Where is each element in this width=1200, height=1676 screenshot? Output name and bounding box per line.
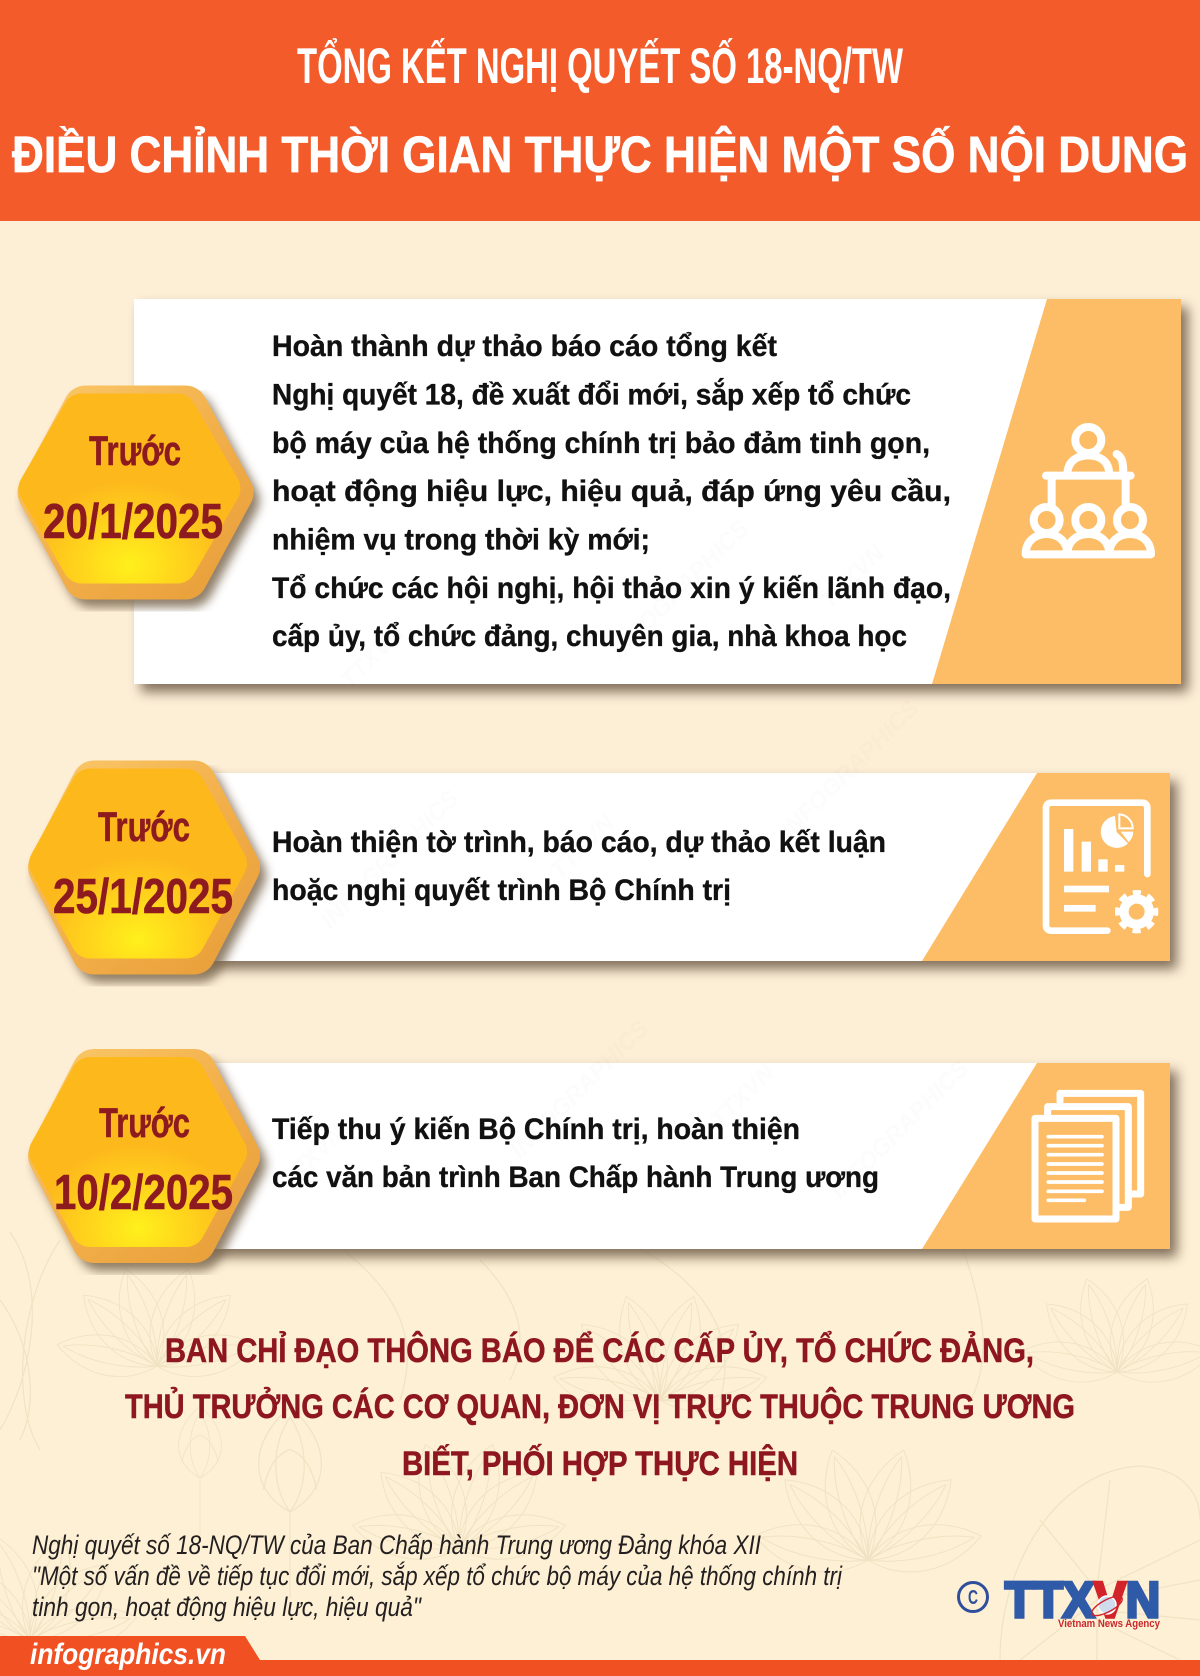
hexagon: date 20/1/2025: Trước (89, 427, 181, 474)
text: step 3 description: Tiếp thu ý kiến Bộ Chính trị, hoàn thiện (272, 1113, 800, 1146)
panel: step 3 (200, 1015, 1170, 1249)
text: step 2 description: Hoàn thiện tờ trình, báo cáo, dự thảo kết luận (272, 826, 886, 859)
text: step 1 description: bộ máy của hệ thống chính trị bảo đảm tinh gọn, (272, 427, 930, 460)
source note: Nghị quyết số 18-NQ/TW của Ban Chấp hành Trung ương Đảng khóa XII (32, 1530, 761, 1560)
hexagon: date 20/1/2025 (38, 408, 232, 578)
source note: tinh gọn, hoạt động hiệu lực, hiệu quả" (32, 1592, 422, 1622)
text: step 2 description: hoặc nghị quyết trình Bộ Chính trị (272, 874, 731, 907)
text: step 1 description: nhiệm vụ trong thời kỳ mới; (272, 524, 650, 556)
text: step 1 description: cấp ủy, tổ chức đảng, chuyên gia, nhà khoa học (272, 620, 907, 653)
text: step 3 description (272, 1113, 879, 1194)
text: step 1 description: Hoàn thành dự thảo báo cáo tổng kết (272, 330, 777, 363)
text: step 1 description: Nghị quyết 18, đề xuất đổi mới, sắp xếp tổ chức (272, 378, 911, 412)
hexagon: date 25/1/2025 (48, 782, 238, 952)
closing statement (125, 1331, 1075, 1483)
logo: TTXVN Vietnam News Agency: TTXVN (1005, 1572, 1160, 1628)
title line 1: TỔNG KẾT NGHỊ QUYẾT SỐ 18-NQ/TW (297, 37, 904, 94)
text: step 1 description: hoạt động hiệu lực, hiệu quả, đáp ứng yêu cầu, (272, 475, 951, 508)
hexagon: date 25/1/2025: Trước (98, 803, 190, 850)
text: step 1 description: Tổ chức các hội nghị, hội thảo xin ý kiến lãnh đạo, (272, 572, 951, 605)
panel: step 1 (134, 299, 1181, 694)
footer band (0, 1636, 1200, 1676)
hexagon: date 10/2/2025: Trước (99, 1099, 190, 1146)
text: step 3 description: các văn bản trình Ban Chấp hành Trung ương (272, 1161, 879, 1194)
logo: TTXVN Vietnam News Agency: Vietnam News Agency (1058, 1618, 1161, 1630)
icon: report with chart and gear (1046, 803, 1156, 931)
icon: meeting speaker and audience (1026, 427, 1151, 554)
closing statement: BAN CHỈ ĐẠO THÔNG BÁO ĐỂ CÁC CẤP ỦY, TỔ CHỨC ĐẢNG, (165, 1331, 1034, 1370)
panel: step 2 (200, 695, 1170, 961)
hexagon: date 10/2/2025 (48, 1071, 238, 1241)
closing statement: BIẾT, PHỐI HỢP THỰC HIỆN (402, 1444, 798, 1483)
website label: infographics.vn (30, 1638, 226, 1671)
source note: "Một số vấn đề về tiếp tục đổi mới, sắp xếp tổ chức bộ máy của hệ thống chính trị (32, 1560, 843, 1591)
text: step 2 description (272, 826, 886, 907)
text: step 1 description (272, 330, 951, 653)
hexagon: date 20/1/2025: 20/1/2025 (43, 495, 223, 549)
header banner (0, 0, 1200, 221)
logo: TTXVN Vietnam News Agency: C (968, 1587, 978, 1609)
icon: stacked documents (1035, 1093, 1141, 1219)
source note (32, 1530, 843, 1622)
hexagon: date 25/1/2025: 25/1/2025 (53, 870, 233, 924)
hexagon: date 10/2/2025: 10/2/2025 (54, 1166, 233, 1220)
